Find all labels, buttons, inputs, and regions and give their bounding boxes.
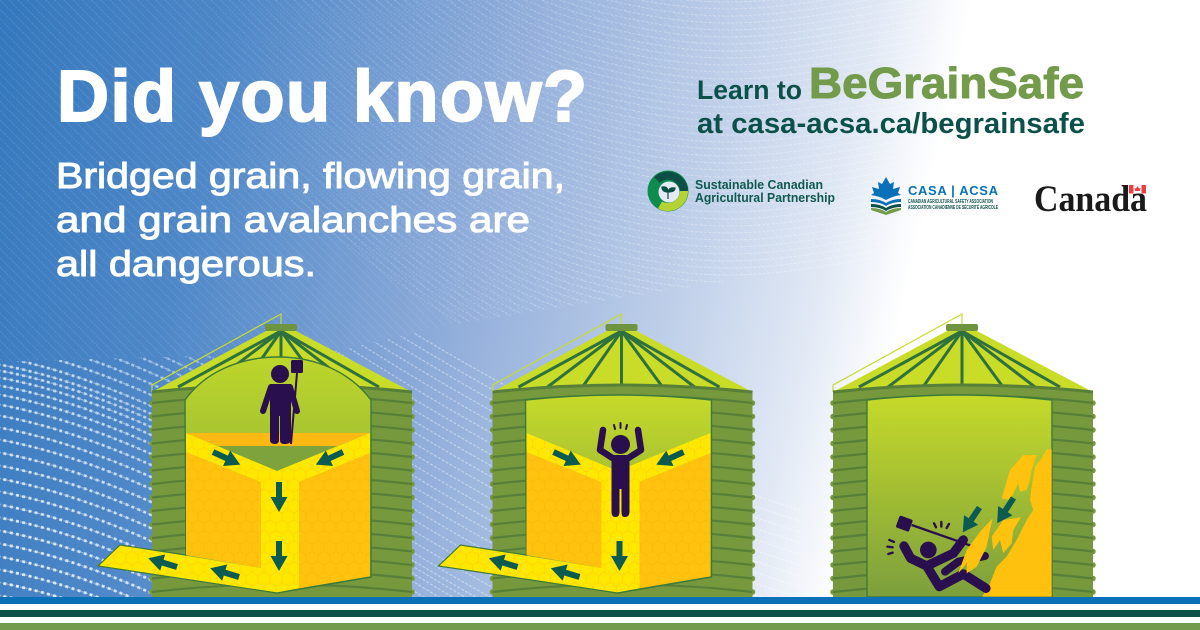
falling worker with shovel (887, 515, 986, 588)
footer stripes (0, 597, 1200, 630)
avalanche grain pile and falling clumps (982, 449, 1052, 597)
silo 1 flowing grain (98, 433, 370, 593)
clump overlapping worker (958, 518, 993, 573)
subheading (56, 155, 565, 284)
silo 1: bridged grain (98, 314, 412, 597)
subheading: Bridged grain, flowing grain, (56, 155, 565, 196)
silo 2 interior (526, 395, 712, 593)
logo: CASA ACSA: ASSOCIATION CANADIENNE DE SÉCURITÉ AGRICOLE (908, 203, 998, 211)
call to action: Learn to (697, 75, 802, 105)
avalanche arrows (956, 493, 1021, 537)
silo 1 worker with shovel (263, 360, 303, 444)
silo 2: flowing grain (438, 314, 752, 597)
silo 3: grain avalanche (833, 314, 1093, 597)
call to action: BeGrainSafe (809, 59, 1084, 108)
logo: Canada wordmark: Canada (1034, 179, 1147, 220)
silo 3 interior (867, 395, 1052, 597)
call to action: at casa-acsa.ca/begrainsafe (697, 108, 1085, 140)
silo 2 sinking worker (600, 423, 641, 517)
title: Did you know? (57, 57, 587, 137)
logo: Sustainable Canadian Agricultural Partnership: Sustainable Canadian (695, 177, 823, 192)
subheading: and grain avalanches are (56, 199, 530, 240)
silo 1 interior (185, 357, 371, 593)
silo 1 bridged grain crust (186, 433, 370, 446)
logo: Sustainable Canadian Agricultural Partnership (648, 170, 835, 212)
logo: CASA ACSA (871, 177, 999, 215)
subheading: all dangerous. (56, 243, 316, 284)
logo: CASA ACSA: CANADIAN AGRICULTURAL SAFETY ASSOCIATION (908, 199, 993, 205)
call to action (697, 59, 1085, 140)
silo 1 flow arrows (146, 444, 347, 585)
silo 1 cavity under the crust (218, 446, 337, 471)
logo: Sustainable Canadian Agricultural Partnership: Agricultural Partnership (695, 190, 835, 205)
silo 2 flow arrows (486, 444, 687, 585)
silo 2 flowing grain (438, 433, 710, 593)
logo: CASA ACSA: CASA | ACSA (908, 183, 999, 198)
